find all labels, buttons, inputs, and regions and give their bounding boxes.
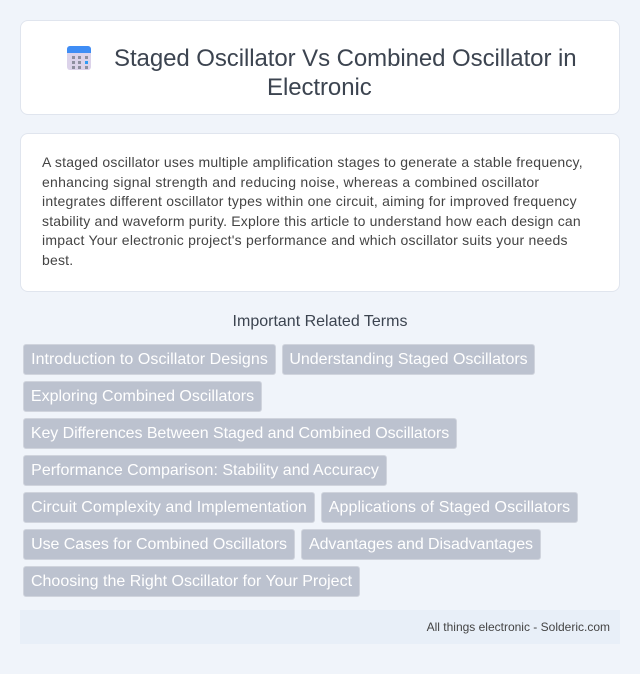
tag: Choosing the Right Oscillator for Your Project: [31, 573, 352, 590]
tag: Advantages and Disadvantages: [309, 536, 533, 553]
tag: Understanding Staged Oscillators: [289, 351, 528, 368]
tag: Performance Comparison: Stability and Accuracy: [31, 462, 379, 479]
tag: [23, 455, 387, 486]
tag: [23, 492, 315, 523]
intro text: [42, 154, 583, 268]
tag: [321, 492, 578, 523]
footer text: All things electronic - Solderic.com: [427, 620, 610, 634]
tag: Circuit Complexity and Implementation: [31, 499, 307, 516]
footer bar: [20, 610, 620, 644]
title line 1: Staged Oscillator Vs Combined Oscillator in: [114, 45, 577, 72]
tag: [282, 344, 535, 375]
intro text: impact Your electronic project's performance and which oscillator suits your needs: [42, 232, 568, 248]
tag: [23, 418, 457, 449]
intro card: [20, 133, 620, 292]
intro text: A staged oscillator uses multiple amplification stages to generate a stable frequency,: [42, 154, 583, 170]
intro text: stability and waveform purity. Explore this article to understand how each design can: [42, 213, 581, 229]
intro text: enhancing signal strength and reducing noise, whereas a combined oscillator: [42, 174, 539, 190]
tag list: [23, 344, 578, 597]
heading: related terms: Important Related Terms: [233, 313, 407, 330]
title line 2: Electronic: [267, 74, 372, 101]
intro text: integrates different oscillator types within one circuit, aiming for improved frequency: [42, 193, 577, 209]
tag: Applications of Staged Oscillators: [329, 499, 570, 516]
icon: calendar grid: [67, 46, 91, 70]
tag: Introduction to Oscillator Designs: [31, 351, 268, 368]
tag: [23, 381, 262, 412]
tag: Key Differences Between Staged and Combined Oscillators: [31, 425, 449, 442]
title card: [20, 20, 620, 115]
tag: Exploring Combined Oscillators: [31, 388, 254, 405]
tag: [23, 344, 276, 375]
tag: [23, 529, 295, 560]
tag: [23, 566, 360, 597]
intro text: best.: [42, 252, 73, 268]
tag: Use Cases for Combined Oscillators: [31, 536, 287, 553]
tag: [301, 529, 541, 560]
